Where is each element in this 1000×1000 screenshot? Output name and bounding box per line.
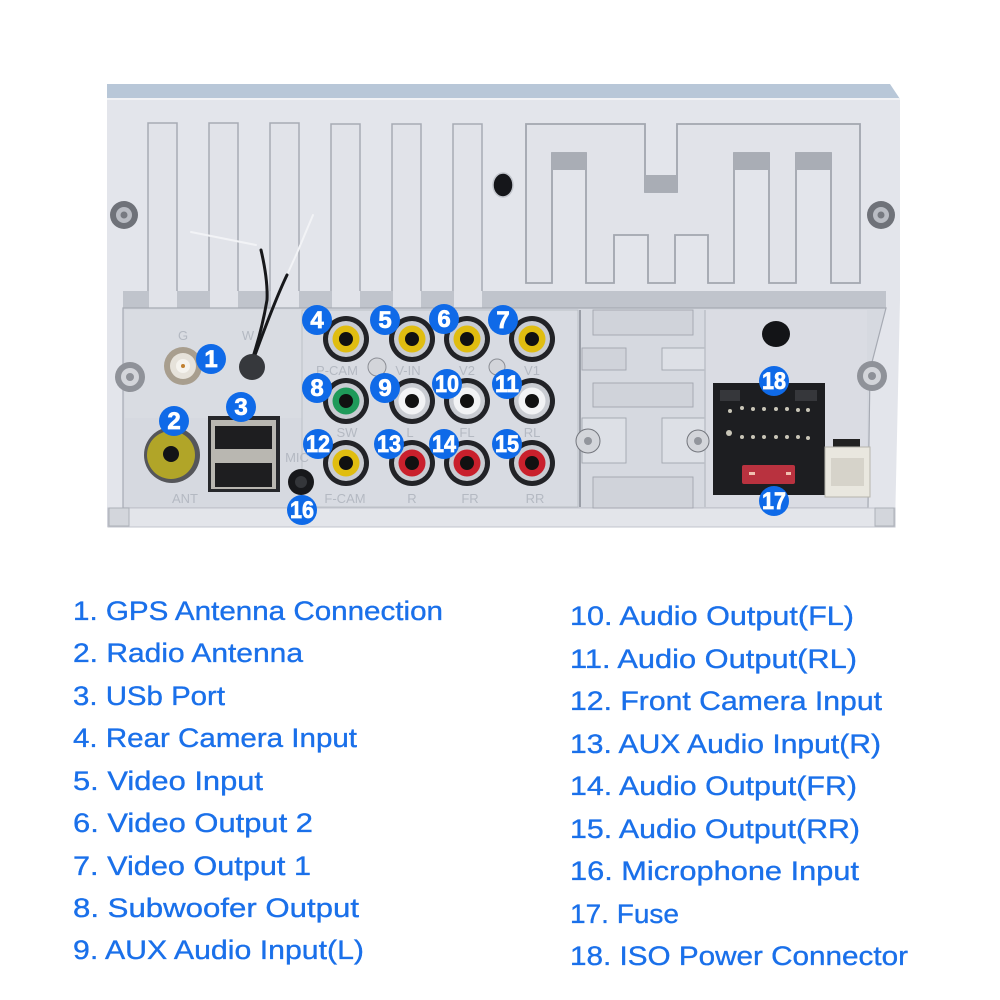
legend: left column — [73, 596, 443, 965]
mounting hole — [493, 173, 513, 197]
lower screws — [115, 358, 887, 453]
silkscreen port labels: L — [406, 425, 414, 440]
silkscreen port labels: SW — [337, 425, 358, 440]
microphone jack — [288, 469, 314, 495]
badge 14: 14 — [432, 431, 457, 458]
legend: right column: 11. Audio Output(RL) — [570, 644, 857, 674]
legend: left column: 9. AUX Audio Input(L) — [73, 935, 364, 965]
silkscreen port labels: F-CAM — [324, 491, 366, 506]
top edge band — [107, 84, 900, 99]
legend: left column: 7. Video Output 1 — [73, 851, 311, 881]
car stereo rear panel photo — [107, 84, 900, 527]
badge 15: 15 — [495, 431, 519, 458]
RCA jack: audio FR — [444, 440, 490, 486]
top screws — [110, 201, 895, 229]
RCA jack: audio RR — [509, 440, 555, 486]
embossed heat-sink pattern — [526, 124, 860, 283]
badge 10: 10 — [435, 371, 459, 398]
silkscreen port labels: ANT — [172, 491, 198, 506]
middle embossed grooves — [582, 310, 705, 508]
silkscreen port labels: V1 — [524, 363, 540, 378]
badge 3 — [226, 392, 256, 422]
silkscreen port labels: MIC — [285, 450, 309, 465]
badge 2: 2 — [167, 408, 181, 435]
badge 13: 13 — [377, 431, 401, 458]
badge 11: 11 — [495, 371, 519, 398]
badge 7: 7 — [496, 307, 510, 334]
USB ports — [208, 416, 280, 492]
legend: left column: 8. Subwoofer Output — [73, 893, 360, 923]
wires — [191, 215, 313, 360]
legend: right column: 15. Audio Output(RR) — [570, 814, 860, 844]
badge 2 — [159, 406, 189, 436]
RCA jack: video out 1 — [509, 316, 555, 362]
badge 17: 17 — [762, 488, 786, 515]
legend: left column: 3. USb Port — [73, 681, 226, 711]
legend: right column — [570, 601, 908, 971]
badge 3: 3 — [234, 394, 248, 421]
badge 1: 1 — [204, 346, 218, 373]
lower connector plate — [123, 308, 886, 508]
legend: left column: 4. Rear Camera Input — [73, 723, 358, 753]
badge 16: 16 — [290, 497, 314, 524]
legend: right column: 10. Audio Output(FL) — [570, 601, 854, 631]
bottom lip — [108, 508, 895, 527]
radio antenna socket — [144, 427, 200, 483]
badge 9 — [370, 373, 400, 403]
RCA jack: subwoofer — [323, 378, 369, 424]
legend: right column: 18. ISO Power Connector — [570, 941, 908, 971]
RCA jack: AUX R — [389, 440, 435, 486]
GPS antenna connector — [164, 347, 202, 385]
badge 6: 6 — [437, 306, 451, 333]
legend: left column: 2. Radio Antenna — [73, 638, 304, 668]
badge 4: 4 — [310, 307, 324, 334]
RCA jack: video out 2 — [444, 316, 490, 362]
silkscreen port labels: V-IN — [395, 363, 421, 378]
badge 7 — [488, 305, 518, 335]
badge 6 — [429, 304, 459, 334]
badge 8 — [302, 373, 332, 403]
RCA jack: front camera — [323, 440, 369, 486]
silkscreen port labels: FR — [461, 491, 479, 506]
legend: right column: 12. Front Camera Input — [570, 686, 883, 716]
chassis body — [107, 98, 900, 527]
callout number badges — [159, 304, 789, 525]
legend: right column: 16. Microphone Input — [570, 856, 860, 886]
legend: left column: 1. GPS Antenna Connection — [73, 596, 443, 626]
white auxiliary connector — [825, 439, 870, 497]
legend: right column: 14. Audio Output(FR) — [570, 771, 857, 801]
WiFi cable grommet — [239, 354, 265, 380]
legend: right column: 17. Fuse — [570, 899, 679, 929]
badge 5 — [370, 305, 400, 335]
silkscreen port labels: W — [242, 328, 255, 343]
RCA jack: audio FL — [444, 378, 490, 424]
badge 4 — [302, 305, 332, 335]
badge 1 — [196, 344, 226, 374]
badge 9: 9 — [378, 375, 392, 402]
silkscreen port labels: RR — [526, 491, 544, 506]
badge 8: 8 — [310, 375, 324, 402]
RCA jack: audio RL — [509, 378, 555, 424]
ISO power connector — [713, 383, 825, 495]
silkscreen port labels: R — [407, 491, 417, 506]
silkscreen port labels: P-CAM — [316, 363, 358, 378]
legend: left column: 5. Video Input — [73, 766, 264, 796]
upper right hole — [762, 321, 790, 347]
silkscreen port labels — [172, 328, 544, 506]
badge 18: 18 — [762, 368, 786, 395]
silkscreen port labels: FL — [459, 425, 475, 440]
silkscreen port labels: RL — [524, 425, 540, 440]
RCA jack: AUX L — [389, 378, 435, 424]
legend: right column: 13. AUX Audio Input(R) — [570, 729, 881, 759]
RCA jack: rear camera — [323, 316, 369, 362]
vent slots — [148, 123, 482, 308]
silkscreen port labels: G — [178, 328, 188, 343]
silkscreen port labels: V2 — [459, 363, 475, 378]
badge 5: 5 — [378, 307, 392, 334]
recessed band — [123, 291, 886, 309]
badge 12: 12 — [306, 431, 330, 458]
RCA jack: video in — [389, 316, 435, 362]
fuse — [742, 465, 795, 484]
legend: left column: 6. Video Output 2 — [73, 808, 313, 838]
